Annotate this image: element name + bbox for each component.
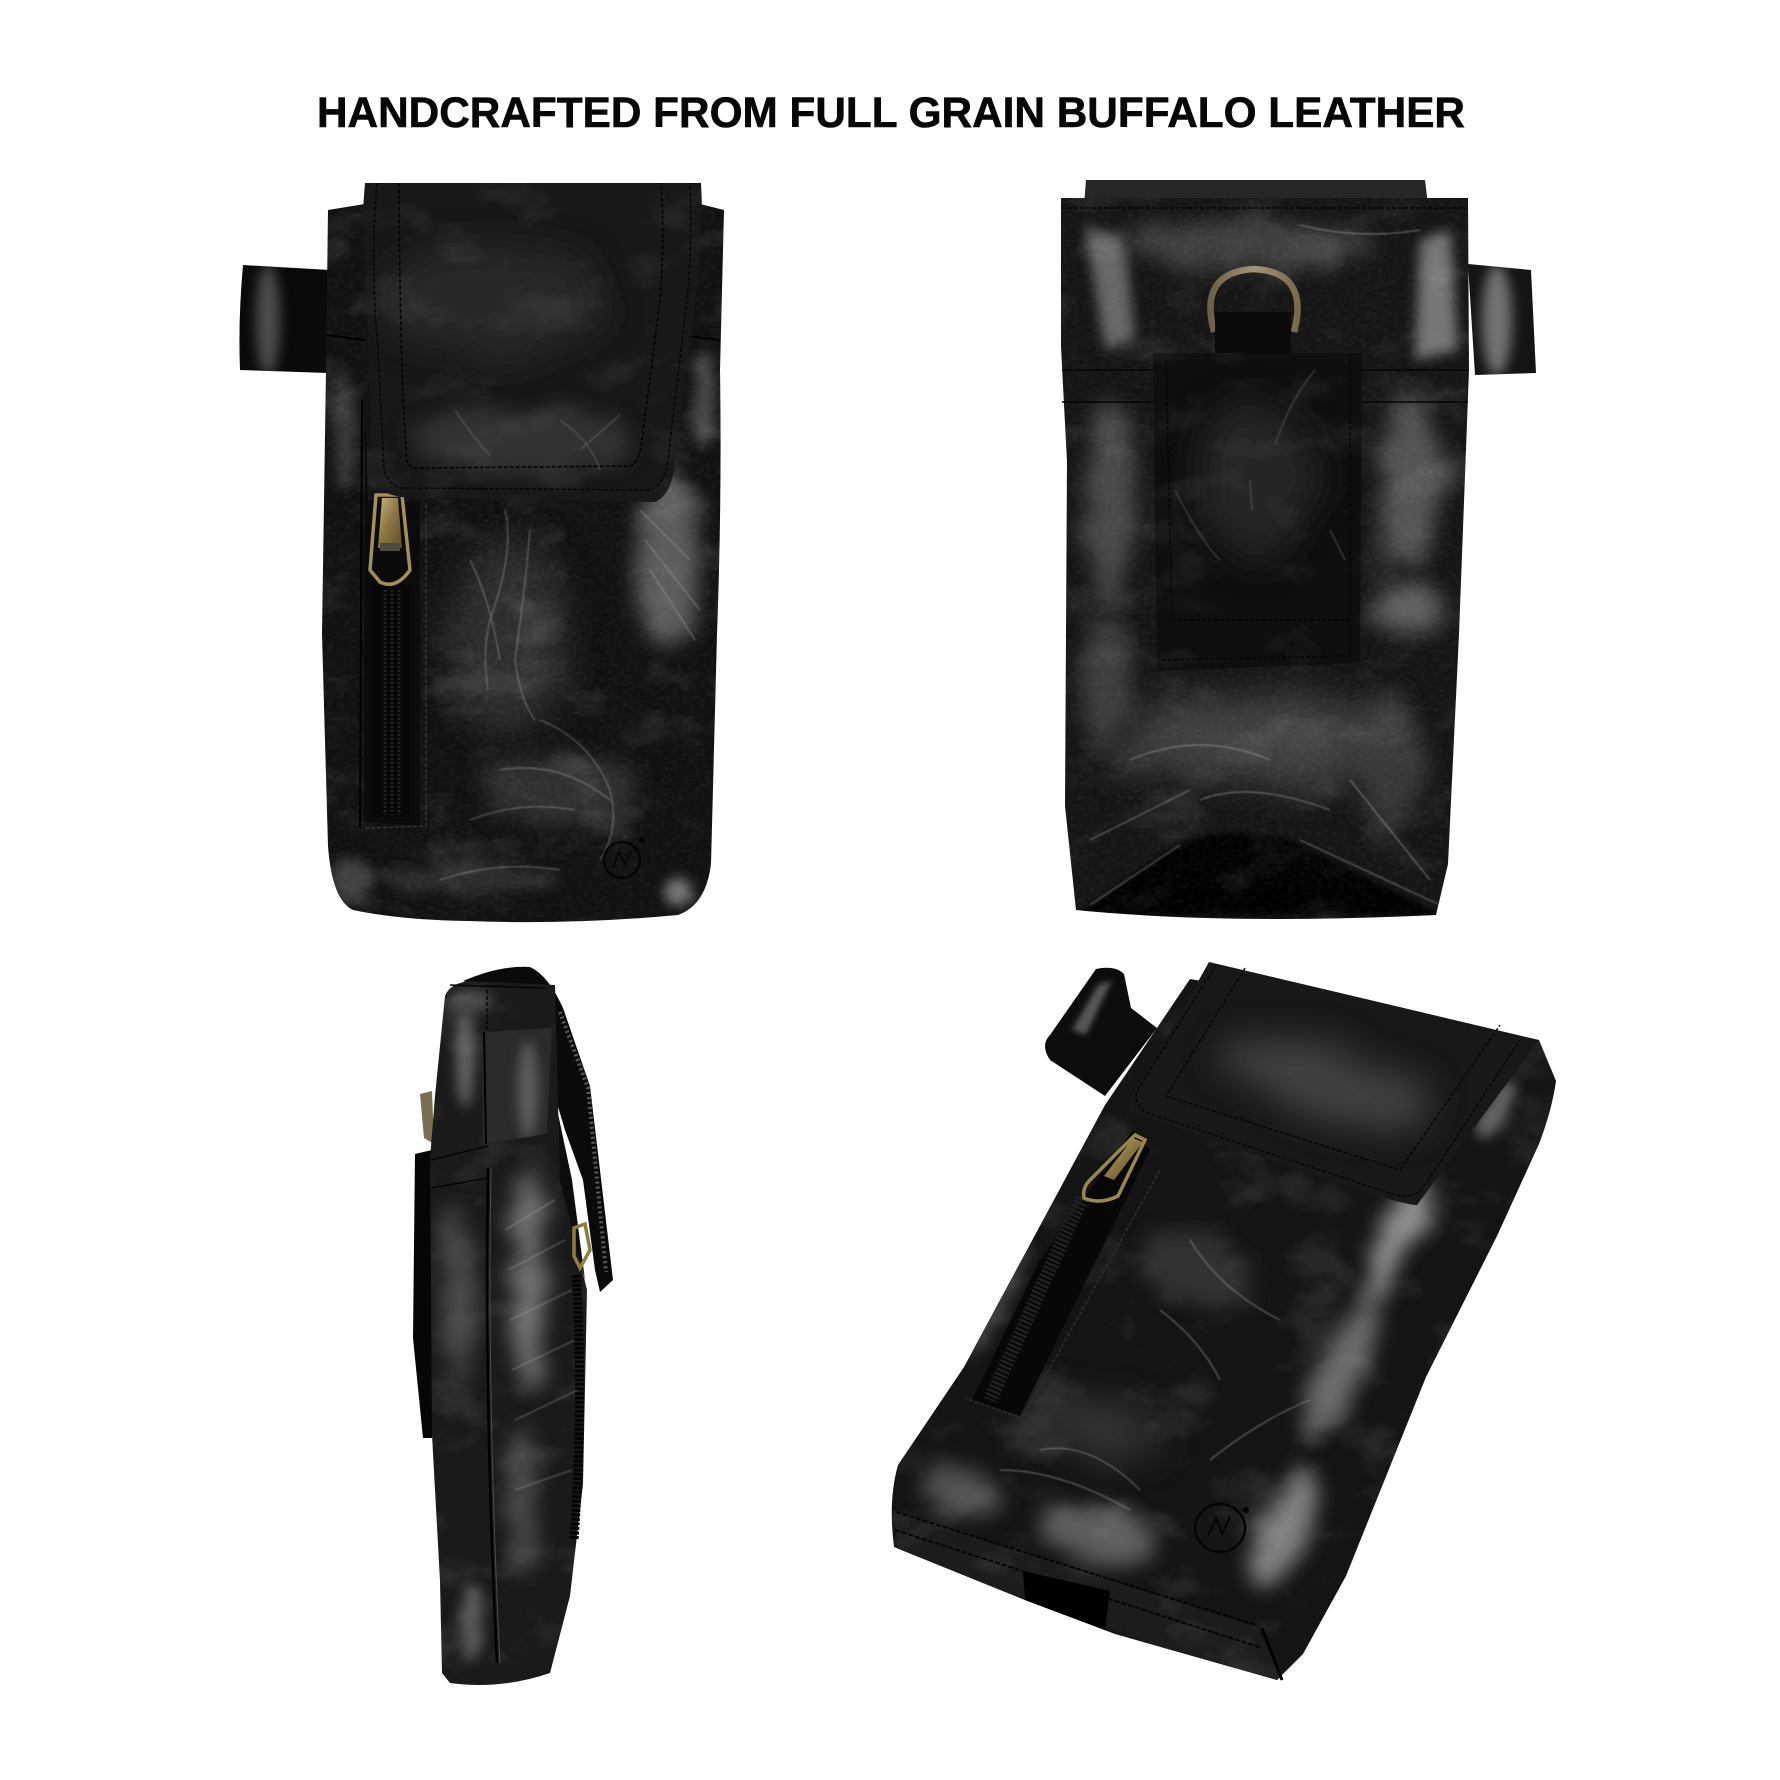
zipper edge, side	[574, 1275, 580, 1540]
back flap edge	[1084, 180, 1428, 205]
belt loop, angled	[1045, 968, 1157, 1096]
belt-loop tab, front view	[239, 264, 330, 376]
bottom slot	[1023, 1571, 1110, 1630]
case body, back view	[1055, 195, 1475, 925]
zipper, angled	[965, 1130, 1160, 1418]
case body, side view	[425, 975, 595, 1690]
D-ring	[1210, 269, 1298, 332]
embossed brand logo	[604, 837, 645, 878]
belt strap	[1150, 350, 1365, 675]
panel: side view of leather case	[413, 967, 613, 1690]
embossed brand logo, angled	[1195, 1504, 1249, 1552]
panel: angled view of leather case	[885, 962, 1565, 1690]
zipper pull	[370, 495, 410, 584]
title: HANDCRAFTED FROM FULL GRAIN BUFFALO LEATHER	[317, 89, 1465, 137]
case body, angled	[885, 970, 1565, 1690]
flap, side	[463, 967, 613, 1292]
belt loop, side	[482, 1028, 552, 1144]
panel: back view of leather case	[1055, 180, 1536, 925]
zipper pull, angled	[1084, 1135, 1145, 1201]
infographic canvas	[239, 96, 1556, 1685]
belt-loop tab, back view	[1468, 264, 1536, 376]
front flap	[360, 180, 710, 510]
strap, side	[413, 1150, 432, 1438]
D-ring leather tab	[1215, 312, 1291, 356]
panel: front view of leather case	[239, 180, 730, 930]
D-ring, side	[420, 1091, 434, 1144]
case body, front view	[320, 200, 730, 930]
flap, angled	[1128, 962, 1539, 1205]
zipper pull, side	[574, 1224, 590, 1268]
zipper pocket	[360, 400, 426, 828]
